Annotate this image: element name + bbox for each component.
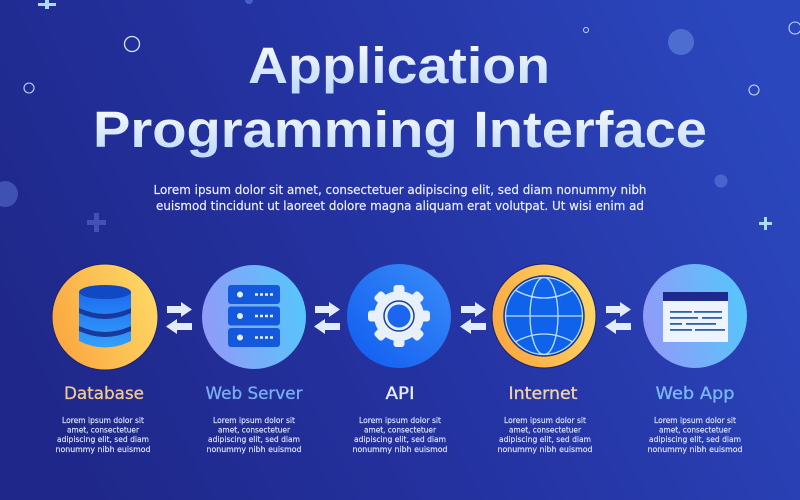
description: internet: amet, consectetuer xyxy=(509,426,582,434)
description: web app: adipiscing elit, sed diam xyxy=(649,435,741,444)
description: API: nonummy nibh euismod xyxy=(352,445,448,454)
description: internet: adipiscing elit, sed diam xyxy=(499,435,591,444)
description: database: adipiscing elit, sed diam xyxy=(57,435,149,444)
arrows: API to internet xyxy=(460,302,486,334)
icon: web server xyxy=(202,265,306,369)
intro text: euismod tincidunt ut laoreet dolore magna aliquam erat volutpat. Ut wisi enim ad xyxy=(156,199,644,213)
label: web server: Web Server xyxy=(206,384,303,403)
arrows: database to web server xyxy=(166,302,192,334)
description: internet: Lorem ipsum dolor sit xyxy=(504,416,586,425)
label: API: API xyxy=(386,384,414,403)
description: database: Lorem ipsum dolor sit xyxy=(62,416,144,425)
description: web server xyxy=(206,416,302,454)
label: web app: Web App xyxy=(656,384,734,403)
arrows: internet to web app xyxy=(605,302,631,334)
label: internet: Internet xyxy=(508,384,578,403)
title: Programming Interface xyxy=(93,101,707,158)
label: database: Database xyxy=(64,384,144,403)
description: web server: nonummy nibh euismod xyxy=(206,445,302,454)
decorative bubbles and sparkles xyxy=(0,0,800,232)
title: Application xyxy=(248,37,550,94)
arrows: web server to API xyxy=(314,302,340,334)
description: web app: nonummy nibh euismod xyxy=(648,445,743,454)
intro text: Lorem ipsum dolor sit amet, consectetuer adipiscing elit, sed diam nonummy nibh xyxy=(154,183,646,197)
title xyxy=(93,37,707,158)
description: API xyxy=(352,416,448,454)
intro text xyxy=(154,183,646,213)
description: web app: amet, consectetuer xyxy=(659,426,732,434)
description: database xyxy=(56,416,151,454)
description: web app xyxy=(648,416,743,454)
description: internet: nonummy nibh euismod xyxy=(498,445,593,454)
icon: web app xyxy=(643,264,747,368)
description: web server: amet, consectetuer xyxy=(218,426,291,434)
description: internet xyxy=(498,416,593,454)
icon: API gear xyxy=(347,264,451,368)
description: web server: Lorem ipsum dolor sit xyxy=(213,416,295,425)
icon: internet globe xyxy=(492,264,596,368)
icon: database xyxy=(52,264,158,370)
description: database: nonummy nibh euismod xyxy=(56,445,151,454)
description: database: amet, consectetuer xyxy=(67,426,140,434)
description: API: Lorem ipsum dolor sit xyxy=(359,416,441,425)
description: API: amet, consectetuer xyxy=(364,426,437,434)
description: web server: adipiscing elit, sed diam xyxy=(208,435,300,444)
description: web app: Lorem ipsum dolor sit xyxy=(654,416,736,425)
description: API: adipiscing elit, sed diam xyxy=(354,435,446,444)
